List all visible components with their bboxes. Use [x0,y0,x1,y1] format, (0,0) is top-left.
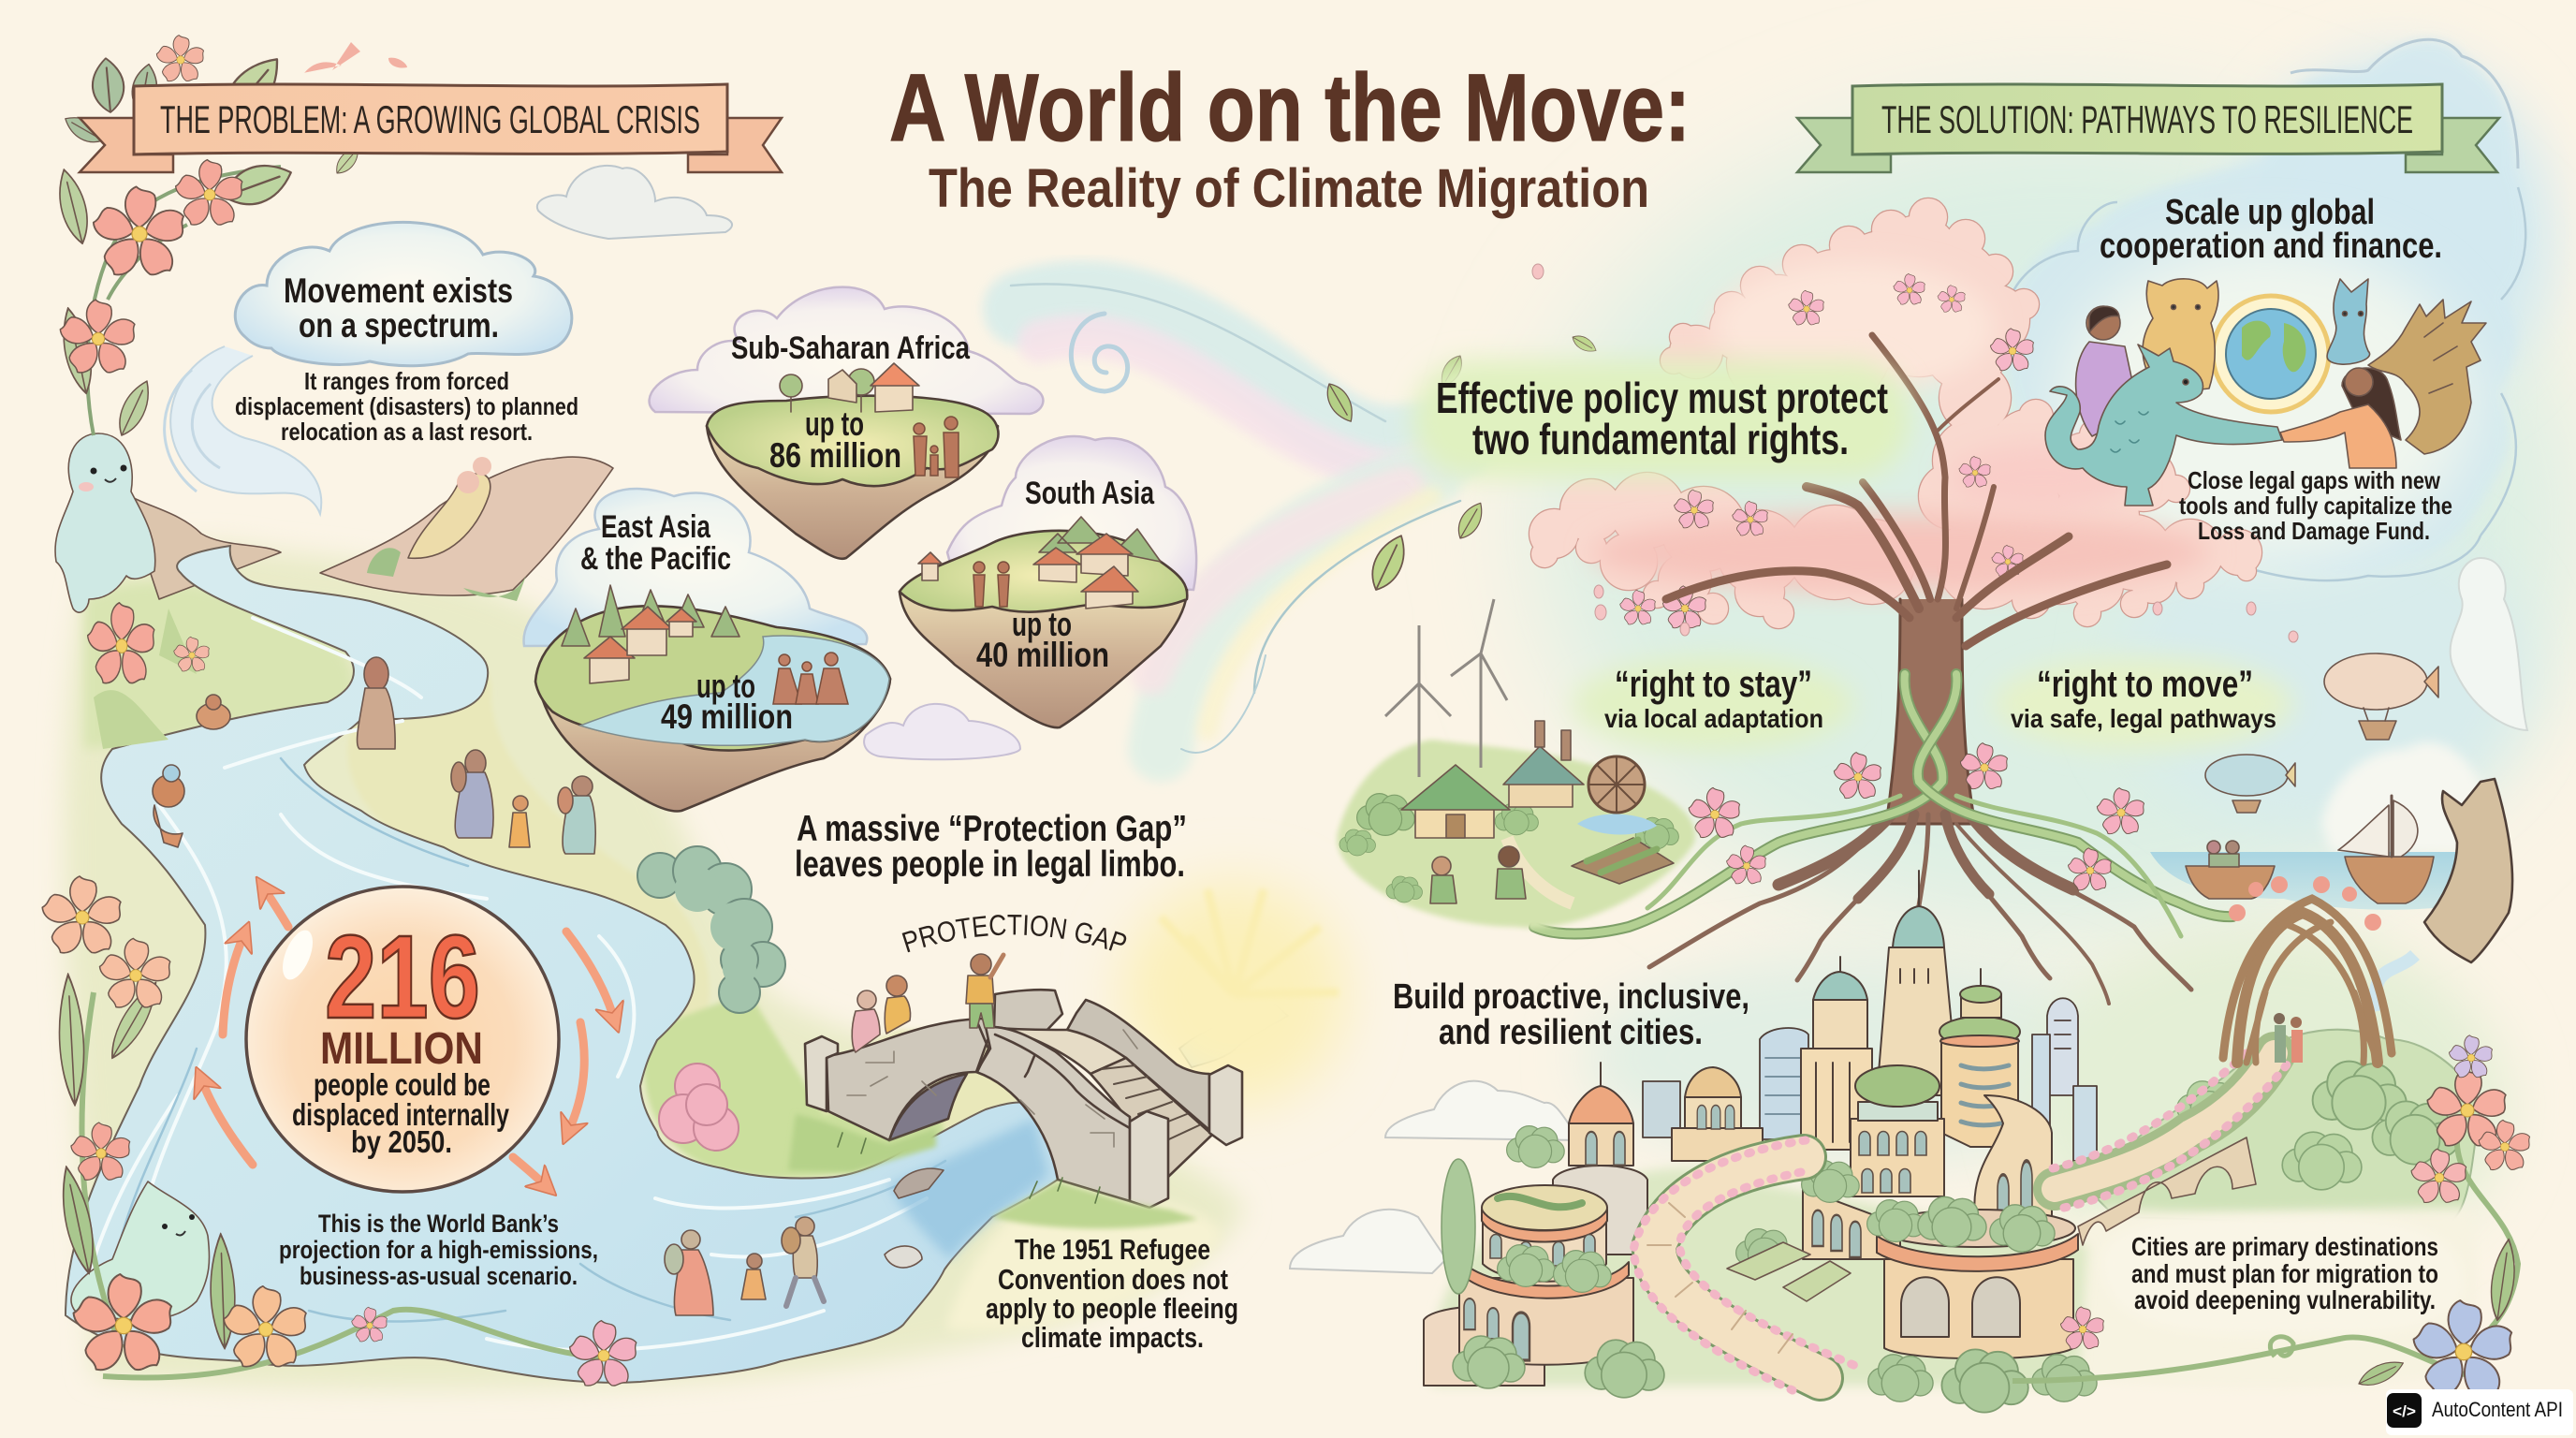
text: 1951 Refugee Convention note [986,1233,1238,1354]
curved label: PROTECTION GAP: PROTECTION GAP [902,915,1127,953]
domed towers left [1553,1063,1763,1255]
floral border: top left [52,36,407,440]
text: 1951 Refugee Convention note: The 1951 Refugee [1015,1233,1210,1266]
banner: the problem [80,84,782,172]
glow [1573,657,1853,751]
badge: AutoContent API: </> [2393,1402,2416,1420]
heading: movement spectrum: Movement exists [284,271,513,310]
clouds near city [1290,1081,1582,1273]
sea [2150,852,2475,910]
banner: the problem: THE PROBLEM: A GROWING GLOBAL CRISIS [160,97,700,141]
glow [1994,657,2293,751]
people travelling along riverbank [153,657,824,1315]
text: protection gap heading [795,809,1187,885]
pastel wind ribbons between islands and policy statement [1011,284,1460,753]
cliff stump [2424,779,2512,962]
text: 1951 Refugee Convention note: Convention does not [998,1263,1228,1296]
globe [2213,296,2329,412]
panel: 216 million statistic bubble [204,887,612,1192]
village and forest [562,585,739,683]
text: build resilient cities: Build proactive, inclusive, [1393,977,1749,1017]
title block [889,54,1690,219]
floral border: bottom left [39,876,641,1391]
floral border: bottom right [2012,1035,2533,1404]
woman in purple [2076,306,2139,436]
text: protection gap heading: leaves people in legal limbo. [795,844,1185,885]
garden plots [1727,1242,1851,1301]
sun glow [1121,882,1346,1107]
panel: South Asia island [900,436,1196,727]
stat: 40 million [976,605,1109,674]
text: cities note: Cities are primary destinations [2131,1232,2438,1261]
orbit arrows [204,894,612,1181]
banner: the solution [1797,84,2499,172]
legal gaps text: Close legal gaps with new [2188,466,2441,494]
text: build resilient cities [1393,977,1749,1052]
water wheel [1577,756,1657,835]
cloud [650,287,1043,414]
heading: movement spectrum [284,271,513,345]
right to move text [2011,664,2276,733]
trees and houses [918,517,1161,609]
family [773,653,848,704]
text: cities note: avoid deepening vulnerability. [2134,1285,2436,1314]
callout: effective policy statement: Effective policy must protect [1436,374,1888,422]
houses [1401,721,1584,838]
blue dragon [2045,345,2282,506]
green hill and bushes [2087,1030,2481,1226]
heading: scale up cooperation: Scale up global [2165,193,2375,232]
curved label: PROTECTION GAP [902,915,1127,953]
canopy [1530,198,2261,628]
body: spectrum description [235,367,578,446]
character: pale spirit right [2451,558,2527,730]
bubble [246,887,559,1192]
cloud [524,489,867,646]
green land behind river [65,544,1245,1389]
stat: 86 million: up to [805,404,864,443]
panel: protection gap bridge [788,882,1346,1228]
villagers [1430,846,1526,903]
body: spectrum description: It ranges from forced [304,367,509,395]
right to stay text [1604,664,1823,733]
callout: effective policy statement [1413,360,1910,477]
stat caption: by 2050. [351,1124,452,1159]
character: blue spirit top left [55,433,155,612]
label: South Asia: South Asia [1025,476,1155,511]
legal gaps text: tools and fully capitalize the [2179,492,2452,520]
cities text backdrop [2101,1217,2464,1335]
text: World Bank projection note: business-as-usual scenario. [300,1262,578,1290]
panel: right to move sea and airships [1994,653,2512,1011]
label: East Asia and the Pacific: & the Pacific [580,541,731,577]
subtitle: The Reality of Climate Migration [929,158,1649,219]
blue creature [2327,279,2370,364]
stat: 86 million [769,404,901,475]
stat caption [292,1067,509,1159]
legal gaps text: Loss and Damage Fund. [2198,517,2430,545]
falling leaves and petals [1321,264,2298,642]
intertwined vines [1534,674,2232,936]
text: protection gap heading: A massive “Protection Gap” [797,809,1187,849]
label: East Asia and the Pacific [580,509,731,577]
panel: the problem river landscape [65,457,1288,1389]
boats [2186,796,2434,903]
text: cities note [2131,1232,2438,1314]
bank shrubs and bushes [85,603,785,1151]
village [780,363,919,412]
city greenery [1442,1126,2097,1413]
archway [2223,899,2392,1063]
ground [1337,740,1695,928]
character: green spirit bottom left [71,1181,210,1320]
right to move text: via safe, legal pathways [2011,704,2276,733]
decorative small clouds [537,166,1020,759]
right to stay text: via local adaptation [1604,704,1823,733]
pale clouds [2321,741,2490,852]
island [707,426,998,559]
text: World Bank projection note: This is the World Bank’s [318,1210,559,1238]
stranded people on bridge [852,954,1003,1052]
mountains [124,457,613,601]
label: East Asia and the Pacific: East Asia [601,509,711,545]
arched windows on towers [1859,1131,2032,1227]
big number 216: 216 [325,911,480,1043]
panel: cherry blossom tree [1321,198,2298,1004]
center terrace buildings [1803,1186,2078,1358]
panel: Sub-Saharan Africa island [650,287,1043,559]
panel: resilient cities [1290,871,2481,1413]
flowers on vines [1687,743,2147,893]
bushes around village [1339,794,1678,902]
text: 1951 Refugee Convention note: climate impacts. [1021,1321,1204,1354]
text: World Bank projection note [279,1210,598,1290]
callout: effective policy statement: two fundamental rights. [1472,415,1849,463]
heading: scale up cooperation: cooperation and finance. [2100,227,2442,266]
text: cities note: and must plan for migration to [2131,1259,2438,1288]
panel: right to stay village [1337,599,1853,928]
panel: East Asia and the Pacific island [524,489,890,812]
heading: movement spectrum: on a spectrum. [299,306,499,345]
stat: 49 million [661,667,793,736]
body: spectrum description: displacement (disasters) to planned [235,392,578,420]
legal gaps text [2179,466,2452,545]
right side watercolor wash [1535,56,2576,1283]
panel: global cooperation creatures [2045,279,2486,545]
heading: scale up cooperation [2100,193,2442,266]
spiky echidna [2368,300,2486,454]
winding river [66,546,1288,1383]
stat: 49 million: 49 million [661,697,793,736]
stat: 40 million: 40 million [976,636,1109,674]
stat: 49 million: up to [696,667,755,705]
vegetable garden [1572,838,1674,884]
stone bridge [788,990,1242,1228]
trunk and branches [1666,335,2167,824]
tall towers [1801,871,2052,1217]
viaduct arches [2078,1137,2256,1245]
woman in orange [2280,368,2401,468]
family [914,417,959,477]
stat caption: displaced internally [292,1097,509,1132]
stat: 40 million: up to [1012,605,1072,643]
main title: A World on the Move: [889,54,1690,161]
cloud [947,436,1196,590]
boulders in river [885,1168,944,1268]
body: spectrum description: relocation as a last resort. [281,418,533,446]
airships [2205,653,2438,813]
label: Sub-Saharan Africa: Sub-Saharan Africa [731,330,971,366]
winding flower road [1633,1049,2289,1390]
terraced round buildings [1424,1185,1633,1386]
blossom details [1618,273,2037,631]
yellow bear [2143,279,2218,393]
text: 1951 Refugee Convention note: apply to people fleeing [986,1292,1238,1325]
roots [1649,814,2191,1004]
right to stay text: “right to stay” [1615,664,1812,705]
island [538,679,890,812]
wind turbines [1385,599,1507,777]
family [973,562,1009,607]
badge: AutoContent API [2386,1389,2573,1435]
panel: blue finance cloud top right [2003,39,2526,580]
panel: movement spectrum cloud [165,222,578,514]
text: World Bank projection note: projection for a high-emissions, [279,1236,598,1264]
arch flowers and travellers [2229,876,2381,1063]
arched windows on terraces [1464,1105,1861,1360]
island [900,590,1187,727]
stat caption: people could be [314,1067,490,1102]
MILLION label: MILLION [320,1024,483,1074]
background glass towers [1643,998,2097,1161]
stat: 86 million: 86 million [769,436,901,475]
text: build resilient cities: and resilient cities. [1439,1013,1703,1052]
right to move text: “right to move” [2037,664,2253,705]
